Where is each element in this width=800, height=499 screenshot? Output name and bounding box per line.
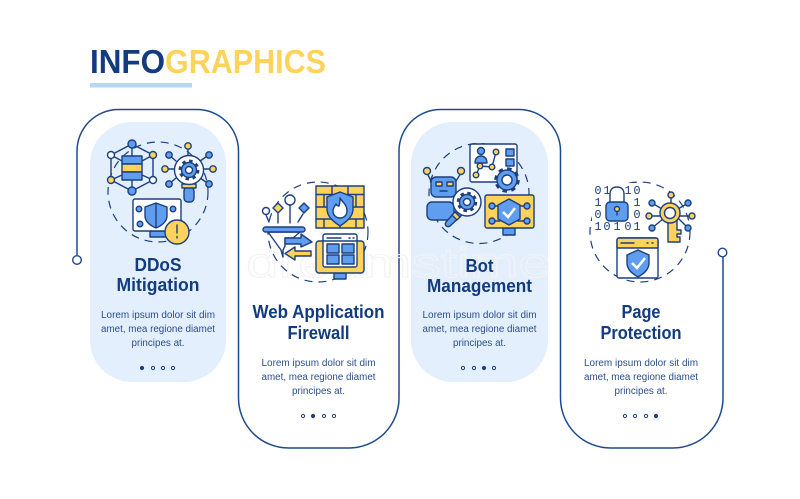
heading: Page	[622, 302, 660, 322]
heading: Web Application	[252, 302, 384, 322]
body text: Lorem ipsum dolor sit dim	[584, 358, 698, 369]
icon: funnel, brick wall and monitor	[262, 182, 368, 282]
body text: Lorem ipsum dolor sit dim	[422, 310, 536, 321]
body text: Lorem ipsum dolor sit dim	[262, 358, 376, 369]
icon: binary lock, key and browser: 0	[633, 184, 641, 198]
icon: binary lock, key and browser: 1	[633, 220, 641, 234]
panel: Page Protection	[584, 182, 698, 418]
icon: binary lock, key and browser	[590, 182, 695, 282]
heading line 2: Protection	[600, 323, 682, 343]
connecting outline	[73, 109, 727, 448]
pagination dots	[461, 366, 496, 370]
icon: binary lock, key and browser: 0	[633, 208, 641, 222]
body text	[262, 358, 376, 397]
icon: binary lock, key and browser: 1	[603, 184, 611, 198]
pagination dots	[623, 414, 658, 418]
pagination dots	[301, 414, 336, 418]
icon: binary lock, key and browser: 0	[594, 184, 602, 198]
heading: Bot	[466, 256, 494, 276]
body text: amet, mea regione diamet	[422, 324, 537, 335]
body text	[101, 310, 215, 349]
icon: binary lock, key and browser: 1	[633, 196, 641, 210]
icon: binary lock, key and browser: 1	[624, 184, 632, 198]
icon: binary lock, key and browser: 1	[594, 220, 602, 234]
icon: binary lock, key and browser: 0	[624, 220, 632, 234]
heading line 2: Firewall	[288, 323, 350, 343]
body text: principes at.	[132, 338, 184, 349]
panel: Web Application Firewall	[252, 182, 384, 418]
icon: binary lock, key and browser: 1	[594, 196, 602, 210]
panel background: Bot Management	[411, 122, 548, 382]
body text	[422, 310, 537, 349]
body text: principes at.	[453, 338, 506, 349]
title	[90, 43, 326, 80]
title underline	[90, 83, 192, 88]
body text: principes at.	[292, 386, 345, 397]
title: INFO	[90, 43, 165, 80]
watermark: dreamstime	[246, 239, 551, 286]
body text: principes at.	[614, 386, 668, 397]
body text: Lorem ipsum dolor sit dim	[101, 310, 215, 321]
icon: binary lock, key and browser: 0	[594, 208, 602, 222]
panel: Bot Management	[422, 144, 537, 370]
panel: DDoS Mitigation	[101, 140, 216, 370]
pagination dots	[140, 366, 175, 370]
icon: robot, analytics card and monitor	[424, 144, 534, 244]
icon: server network, gear and monitor alert	[108, 140, 216, 244]
heading line 2: Management	[427, 276, 532, 296]
heading: DDoS	[134, 255, 182, 275]
heading line 2: Mitigation	[116, 275, 200, 295]
icon: binary lock, key and browser: 1	[613, 220, 621, 234]
panel background: DDoS	[90, 122, 226, 382]
icon: binary lock, key and browser: 0	[603, 220, 611, 234]
body text: amet, mea regione diamet	[584, 372, 698, 383]
body text	[584, 358, 698, 397]
title: GRAPHICS	[165, 43, 326, 80]
body text: amet, mea regione diamet	[101, 324, 215, 335]
body text: amet, mea regione diamet	[262, 372, 376, 383]
